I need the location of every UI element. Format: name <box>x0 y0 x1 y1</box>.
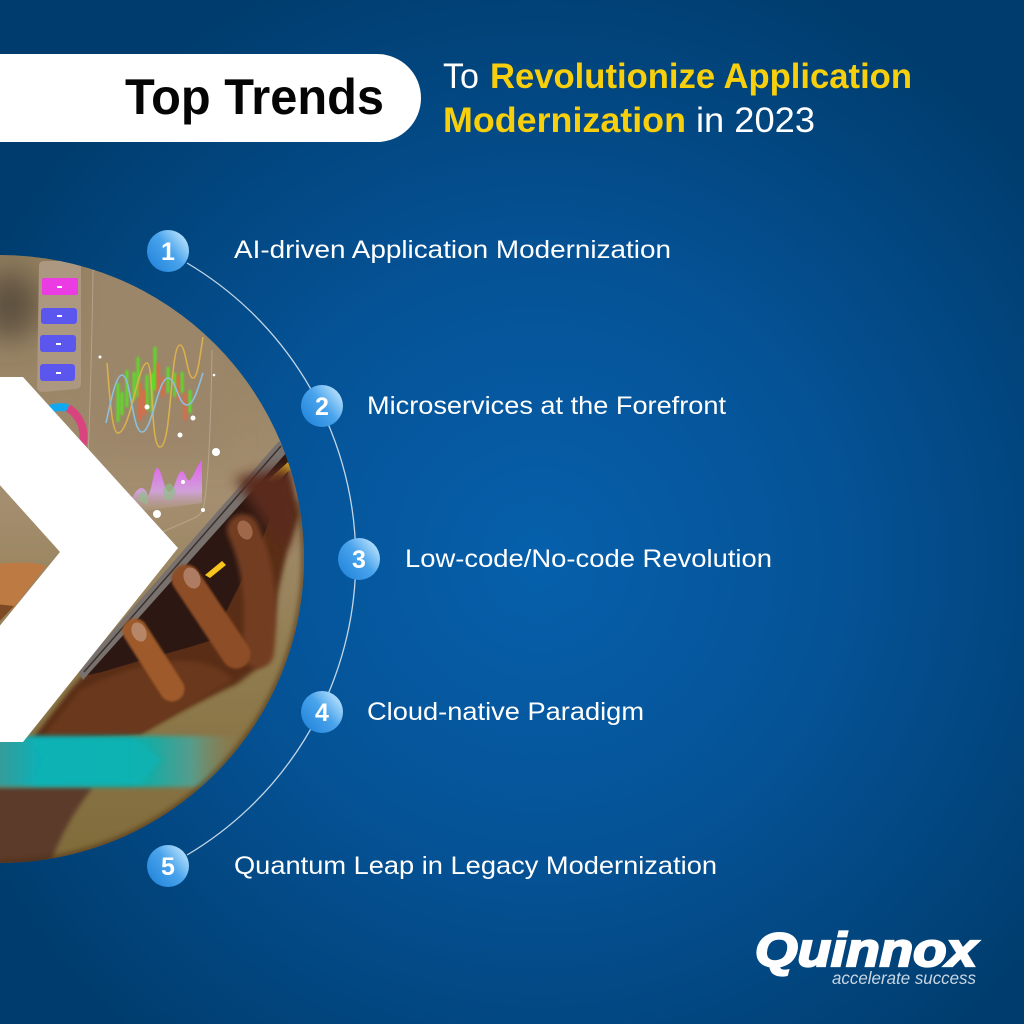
item 1 <box>147 230 671 272</box>
badge 2: 2 <box>315 393 329 421</box>
logo: Quinnox accelerate success: accelerate success <box>832 968 976 988</box>
white chevron <box>0 377 178 742</box>
middle finger <box>135 631 172 689</box>
hand <box>0 441 298 742</box>
area chart <box>132 460 202 512</box>
badge 3 <box>338 538 380 580</box>
title: Top Trends: Top Trends <box>125 69 384 125</box>
second hand behind chevron <box>0 563 46 610</box>
palm and back of hand <box>30 460 298 742</box>
blurred dark top left <box>0 271 40 339</box>
heading: To <box>443 57 479 96</box>
item 5: Quantum Leap in Legacy Modernization <box>234 852 717 880</box>
lower arm <box>0 787 93 870</box>
item 2: Microservices at the Forefront <box>367 392 726 420</box>
heading <box>443 57 912 140</box>
glowing dots <box>98 356 220 518</box>
chart frame lines <box>88 270 212 533</box>
logo: Quinnox accelerate success: Quinnox <box>755 923 979 976</box>
index finger <box>186 579 236 654</box>
item 3: Low-code/No-code Revolution <box>405 545 772 573</box>
donut chart <box>50 407 84 446</box>
fingernails <box>183 568 201 588</box>
title pill <box>0 54 421 142</box>
badge 4 <box>301 691 343 733</box>
item 5 <box>147 845 717 887</box>
badge 2 <box>301 385 343 427</box>
item 1: AI-driven Application Modernization <box>234 236 671 264</box>
teal chevron band <box>0 736 240 787</box>
badge 1: 1 <box>161 238 175 266</box>
item 3 <box>338 538 772 580</box>
heading: in 2023 <box>696 101 815 140</box>
holographic panel <box>37 261 81 392</box>
badge 5: 5 <box>161 853 175 881</box>
photo circle: hand holding phone with holographic charts <box>0 250 315 870</box>
badge 5 <box>147 845 189 887</box>
heading: Revolutionize Application <box>490 57 912 96</box>
line and candle chart <box>106 337 203 447</box>
heading: Modernization <box>443 101 686 140</box>
badge 1 <box>147 230 189 272</box>
connecting arc <box>187 263 356 855</box>
item 4: Cloud-native Paradigm <box>367 698 644 726</box>
badge 4: 4 <box>315 699 329 727</box>
yellow screen glints <box>268 462 290 480</box>
logo: Quinnox accelerate success <box>755 923 979 988</box>
item 2 <box>301 385 726 427</box>
phone back <box>84 444 292 676</box>
rim shading <box>0 500 304 863</box>
phone edge <box>78 441 288 680</box>
upper right fingers <box>235 466 298 552</box>
item 4 <box>301 691 644 733</box>
badge 3: 3 <box>352 546 366 574</box>
